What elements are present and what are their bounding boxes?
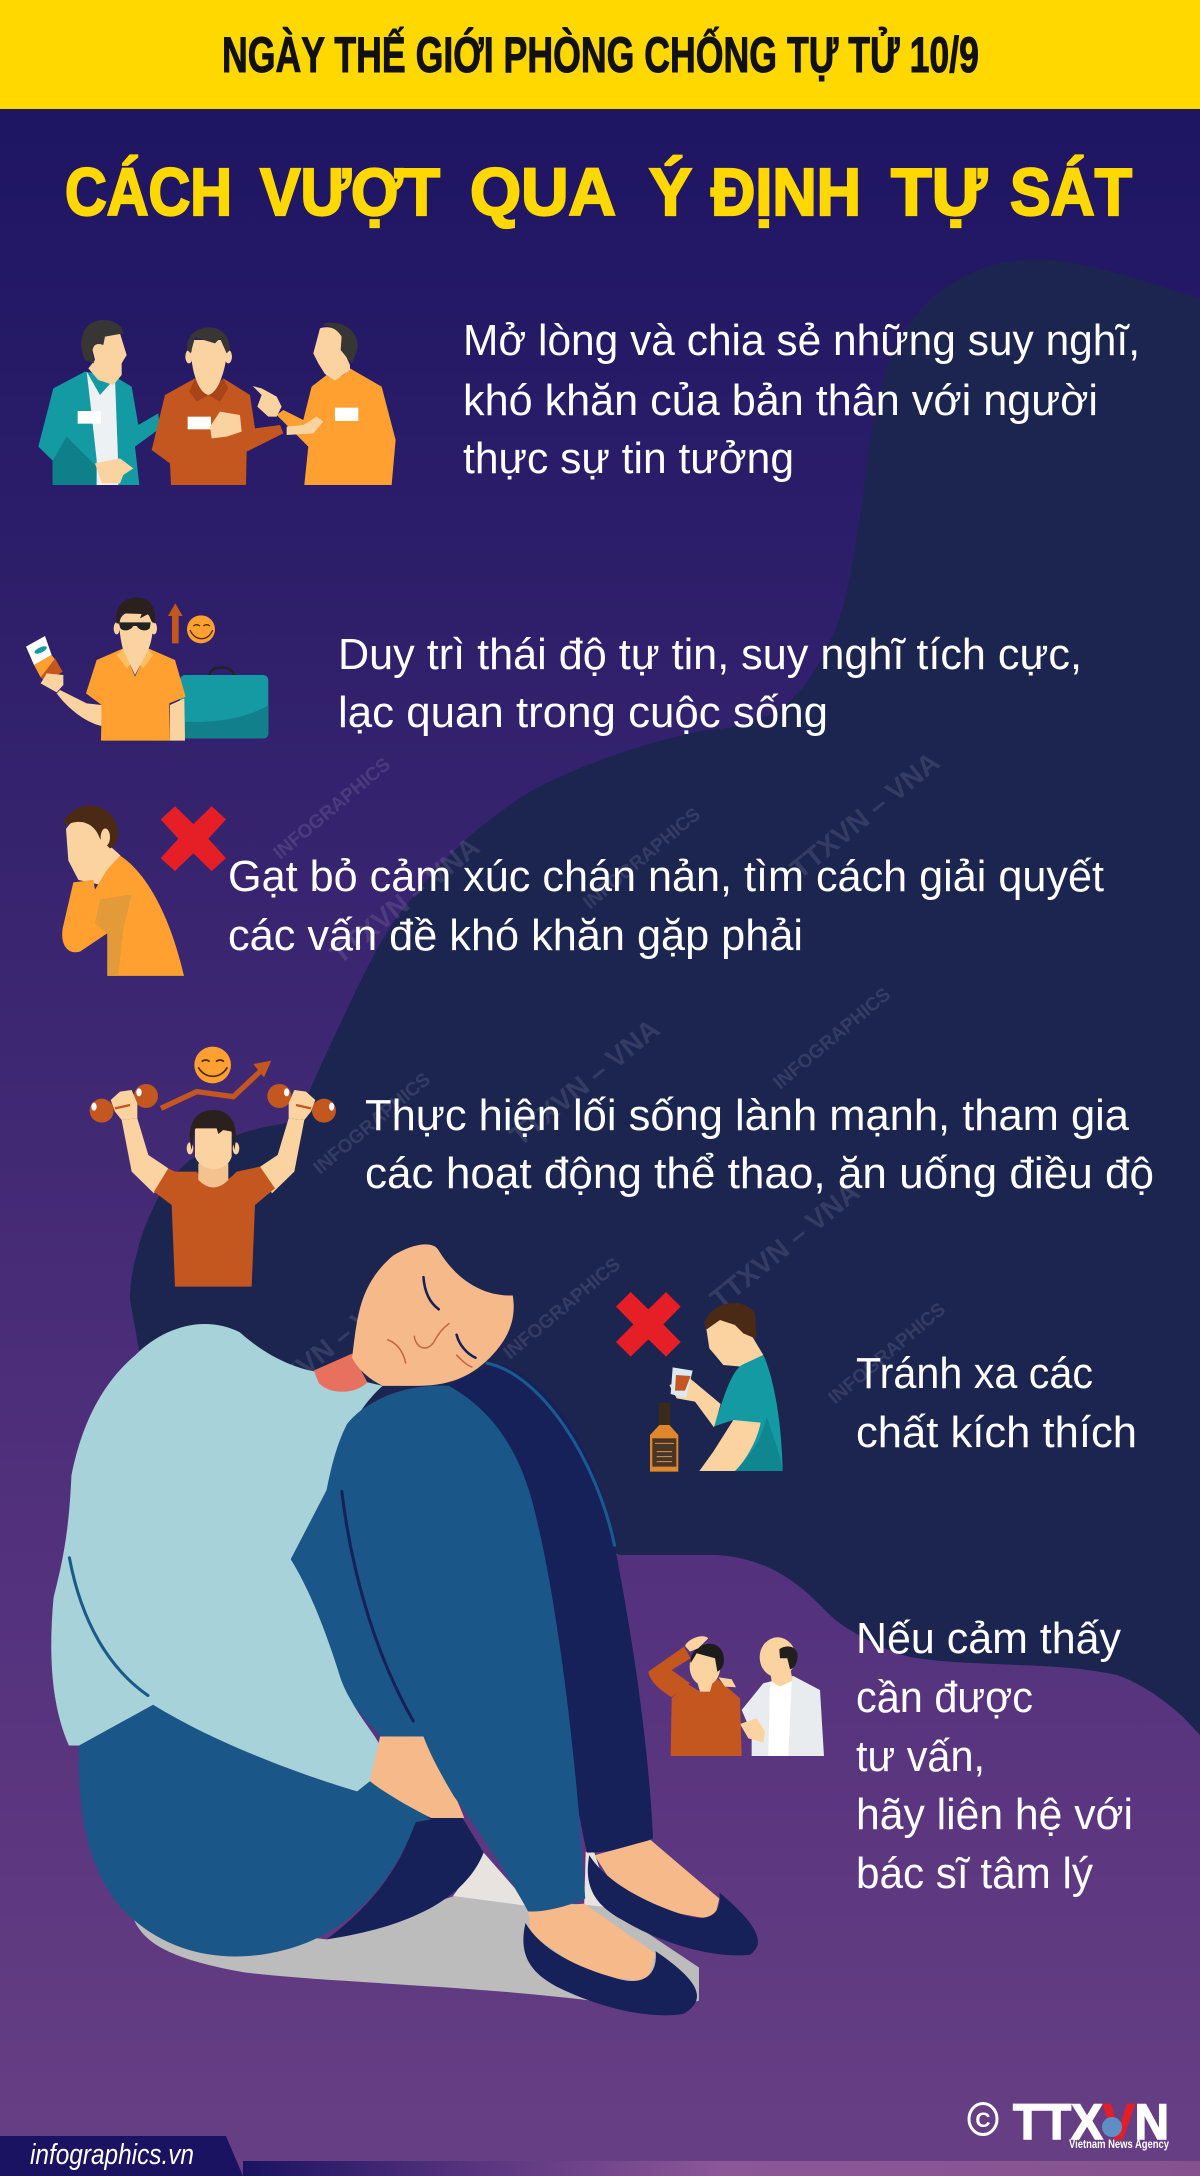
text block 2: Duy trì thái độ tự tin, suy nghĩ tích cực,: [338, 630, 1082, 679]
text block 3: Gạt bỏ cảm xúc chán nản, tìm cách giải quyết: [228, 852, 1104, 901]
floor shadow: [133, 1896, 699, 2011]
back leg: [449, 1365, 653, 1853]
main title: VƯỢT: [260, 155, 440, 230]
woman sitting illustration: [51, 1244, 758, 2015]
front foot and shoe: [523, 1904, 697, 2015]
text block 6: hãy liên hệ với: [856, 1790, 1133, 1839]
icon: three people talking: [38, 320, 396, 485]
icon: red cross: [161, 806, 226, 871]
main title: QUA: [470, 155, 616, 230]
main title: SÁT: [1010, 155, 1132, 230]
text block 4: Thực hiện lối sống lành mạnh, tham gia: [365, 1091, 1130, 1140]
hip and thigh: [79, 1705, 431, 1956]
watermarks: TTXVN – VNA: [324, 831, 485, 970]
main title: CÁCH: [65, 155, 232, 230]
text block 1: thực sự tin tưởng: [463, 434, 794, 483]
shirt: [51, 1324, 383, 1791]
logo: TTXVN: Vietnam News Agency: [1069, 2137, 1169, 2151]
icon: confident man with ticket and suitcase: [26, 597, 268, 741]
collar: [314, 1354, 367, 1392]
main title: ĐỊNH: [711, 155, 861, 230]
text block 3: [228, 852, 1104, 960]
text block 1: Mở lòng và chia sẻ những suy nghĩ,: [463, 316, 1140, 365]
under-thigh: [327, 1817, 484, 1939]
text block 6: [856, 1614, 1133, 1898]
main title: Ý: [649, 155, 692, 230]
icon: red cross: [616, 1292, 681, 1357]
footer strip: [243, 2161, 1200, 2176]
dark blob background shape: [130, 260, 1200, 1735]
icon: man with head in hands: [62, 806, 184, 976]
top banner: [0, 0, 1200, 109]
watermarks: TTXVN – VNA: [249, 1276, 410, 1415]
text block 5: chất kích thích: [856, 1408, 1137, 1457]
text block 2: [338, 630, 1082, 737]
watermarks: TTXVN – VNA: [704, 1176, 865, 1315]
watermarks: INFOGRAPHICS: [270, 754, 395, 864]
watermarks: [249, 746, 950, 1415]
shirt crease: [69, 1558, 148, 1696]
text block 6: tư vấn,: [856, 1732, 985, 1781]
watermarks: INFOGRAPHICS: [310, 1069, 435, 1179]
watermarks: INFOGRAPHICS: [770, 984, 895, 1094]
icons: alcohol and doctor: [616, 1292, 824, 1756]
text block 5: [856, 1349, 1137, 1457]
footer tab: infographics.vn: infographics.vn: [30, 2139, 194, 2171]
face: [352, 1244, 514, 1386]
text block 6: cần được: [856, 1673, 1033, 1722]
logo: TTXVN: TTXVN: [1013, 2094, 1169, 2150]
text block 3: các vấn đề khó khăn gặp phải: [228, 911, 803, 960]
icon: man drinking: [669, 1303, 783, 1471]
front leg: [291, 1386, 585, 1911]
watermarks: TTXVN – VNA: [784, 746, 945, 885]
text block 1: khó khăn của bản thân với người: [463, 376, 1098, 425]
icons: head in hands and cross: [62, 806, 226, 976]
footer tab: infographics.vn: [0, 2136, 243, 2176]
icon: worried man: [648, 1636, 742, 1756]
main title: TỰ: [891, 155, 987, 230]
text block 5: Tránh xa các: [856, 1349, 1093, 1398]
text block 1: [463, 316, 1140, 483]
text block 6: Nếu cảm thấy: [856, 1614, 1121, 1663]
icon: whisky bottle: [650, 1403, 678, 1472]
leg crease: [342, 1491, 413, 1721]
text block 4: [365, 1091, 1154, 1198]
watermarks: TTXVN – VNA: [504, 1013, 665, 1152]
main title: [65, 155, 1132, 230]
watermarks: INFOGRAPHICS: [825, 1299, 950, 1409]
logo: TTXVN: C: [975, 2109, 991, 2132]
icon: man lifting dumbbells: [90, 1047, 336, 1287]
text block 2: lạc quan trong cuộc sống: [338, 688, 828, 737]
text block 6: bác sĩ tâm lý: [856, 1849, 1093, 1898]
icon: doctor: [740, 1637, 824, 1756]
text block 4: các hoạt động thể thao, ăn uống điều độ: [365, 1149, 1154, 1198]
back leg highlight: [486, 1363, 615, 1547]
hand: [370, 1736, 464, 1818]
back foot and shoe: [588, 1840, 758, 1955]
watermarks: INFOGRAPHICS: [580, 804, 705, 914]
watermarks: INFOGRAPHICS: [500, 1254, 625, 1364]
